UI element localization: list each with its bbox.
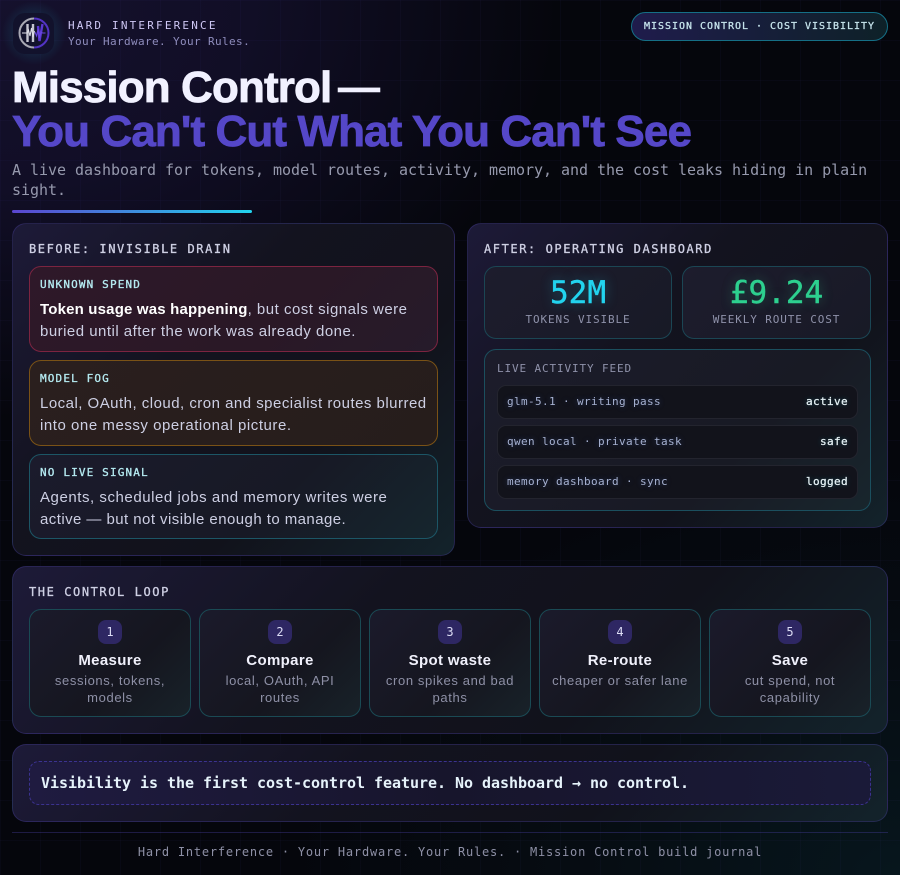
panel: before <box>12 223 455 556</box>
feed row: memory dashboard: logged <box>806 475 848 488</box>
step 5: save: cut spend, not capability <box>745 673 835 705</box>
card: model fog: into one messy operational picture. <box>40 417 292 434</box>
step 2: compare: Compare <box>246 652 314 669</box>
step 1: measure: 1 <box>106 625 114 639</box>
card: model fog: Local, OAuth, cloud, cron and specialist routes blurred <box>40 395 427 412</box>
step 2: compare: 2 <box>276 625 284 639</box>
stat: tokens visible: 52M <box>550 275 606 311</box>
stat: tokens visible: TOKENS VISIBLE <box>525 313 631 326</box>
brand header <box>8 7 250 60</box>
subtitle <box>12 161 867 199</box>
feed row: glm-5.1: glm-5.1 · writing pass <box>507 395 661 408</box>
card: no live signal: Agents, scheduled jobs and memory writes were <box>40 489 387 506</box>
card: model fog <box>29 360 438 446</box>
card: unknown spend: UNKNOWN SPEND <box>40 278 141 291</box>
heading: before: BEFORE: INVISIBLE DRAIN <box>29 242 232 256</box>
title: Mission Control <box>12 63 331 112</box>
subtitle: sight. <box>12 181 66 199</box>
step 5: save: 5 <box>786 625 794 639</box>
stat: weekly route cost <box>682 266 871 339</box>
stat: tokens visible <box>484 266 672 339</box>
feed row: memory dashboard <box>497 465 858 499</box>
footer <box>12 832 888 862</box>
step 1: measure <box>29 609 191 717</box>
step 2: compare <box>199 609 361 717</box>
feed row: memory dashboard: memory dashboard · sync <box>507 475 668 488</box>
live activity feed: LIVE ACTIVITY FEED <box>497 362 632 375</box>
step 3: spot waste: cron spikes and bad paths <box>386 673 514 705</box>
footer: Hard Interference · Your Hardware. Your Rules. · Mission Control build journal <box>138 845 762 859</box>
card: no live signal <box>29 454 438 539</box>
icon: hard interference logo <box>8 7 60 60</box>
step 1: measure: sessions, tokens, models <box>55 673 165 705</box>
card: unknown spend: buried until after the work was already done. <box>40 323 356 340</box>
step 4: re-route <box>539 609 701 717</box>
accent bar <box>12 210 252 213</box>
title <box>12 63 691 156</box>
title: — <box>338 63 380 110</box>
step 5: save <box>709 609 871 717</box>
brand name: HARD INTERFERENCE <box>68 19 218 32</box>
step 3: spot waste: 3 <box>446 625 454 639</box>
step 5: save: Save <box>772 652 808 669</box>
stat: weekly route cost: £9.24 <box>730 275 823 311</box>
heading: after: AFTER: OPERATING DASHBOARD <box>484 242 713 256</box>
step 4: re-route: Re-route <box>588 652 652 669</box>
callout text box <box>29 761 871 805</box>
feed row: qwen local: safe <box>820 435 848 448</box>
card: model fog: MODEL FOG <box>40 372 110 385</box>
brand tagline: Your Hardware. Your Rules. <box>68 35 250 48</box>
card: unknown spend: Token usage was happening, but cost signals were <box>40 301 408 318</box>
card: no live signal: NO LIVE SIGNAL <box>40 466 149 479</box>
feed row: qwen local <box>497 425 858 459</box>
step 4: re-route: cheaper or safer lane <box>552 673 688 688</box>
card: no live signal: active — but not visible enough to manage. <box>40 511 346 528</box>
callout text box: Visibility is the first cost-control feature. No dashboard → no control. <box>41 774 689 792</box>
subtitle: A live dashboard for tokens, model routes, activity, memory, and the cost leaks hiding in plain <box>12 161 867 179</box>
title: You Can't Cut What You Can't See <box>12 107 691 156</box>
step 3: spot waste: Spot waste <box>409 652 491 669</box>
badge: mission control pill <box>631 12 888 41</box>
feed row: glm-5.1: active <box>806 395 848 408</box>
step 2: compare: local, OAuth, API routes <box>226 673 334 705</box>
badge: mission control pill: MISSION CONTROL · COST VISIBILITY <box>644 21 875 32</box>
heading: control loop: THE CONTROL LOOP <box>29 585 170 599</box>
panel: after <box>467 223 888 528</box>
panel: control loop <box>12 566 888 734</box>
panel: callout <box>12 744 888 822</box>
live activity feed <box>484 349 871 511</box>
feed row: glm-5.1 <box>497 385 858 419</box>
stat: weekly route cost: WEEKLY ROUTE COST <box>713 313 840 326</box>
card: unknown spend <box>29 266 438 352</box>
step 4: re-route: 4 <box>616 625 624 639</box>
step 1: measure: Measure <box>78 652 142 669</box>
step 3: spot waste <box>369 609 531 717</box>
feed row: qwen local: qwen local · private task <box>507 435 682 448</box>
